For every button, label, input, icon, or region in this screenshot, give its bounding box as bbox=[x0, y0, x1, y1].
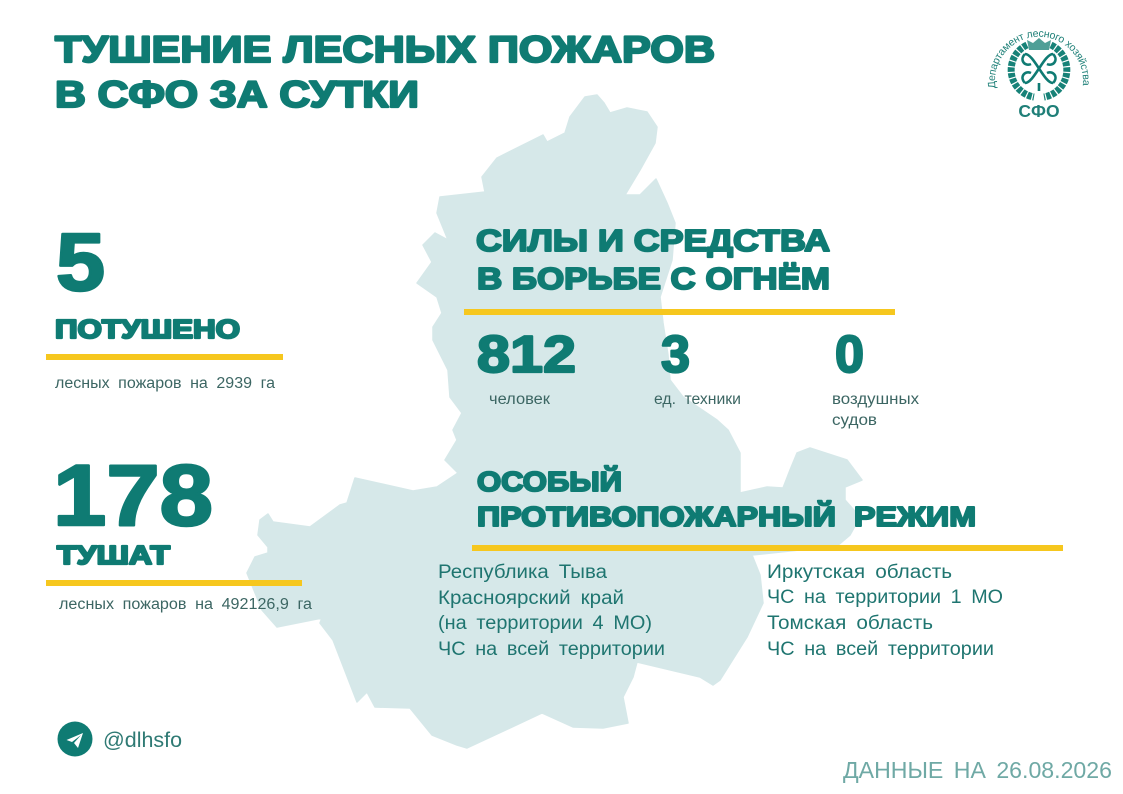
map: Siberian federal district silhouette bbox=[247, 95, 862, 748]
logo: department emblem bbox=[988, 31, 1089, 121]
logo: department emblem: Департамент лесного хозяйства bbox=[988, 31, 1089, 88]
stat: aircraft bbox=[832, 326, 919, 429]
regime list: left column: (на территории 4 МО) bbox=[438, 613, 652, 634]
heading: special fire regime bbox=[472, 465, 1063, 551]
heading: forces and means: В БОРЬБЕ С ОГНЁМ bbox=[477, 261, 830, 296]
title: В СФО ЗА СУТКИ bbox=[55, 74, 419, 115]
regime list: right column: ЧС на всей территории bbox=[767, 639, 994, 660]
data date: ДАННЫЕ НА 26.08.2026 bbox=[843, 757, 1112, 783]
icon: telegram bbox=[58, 722, 92, 756]
stat: aircraft: воздушных bbox=[832, 391, 919, 408]
stat: people: 812 bbox=[477, 326, 576, 384]
heading: special fire regime: ОСОБЫЙ bbox=[477, 465, 622, 497]
regime list: left column: ЧС на всей территории bbox=[438, 639, 665, 660]
heading: forces and means bbox=[464, 223, 895, 315]
regime list: left column bbox=[438, 562, 665, 660]
regime list: left column: Красноярский край bbox=[438, 588, 624, 609]
stat: being extinguished: 178 bbox=[53, 448, 213, 544]
stat: people: человек bbox=[489, 391, 550, 408]
stat: extinguished: 5 bbox=[56, 217, 105, 308]
stat: equipment bbox=[654, 326, 741, 408]
telegram handle: @dlhsfo bbox=[103, 729, 182, 752]
title: ТУШЕНИЕ ЛЕСНЫХ ПОЖАРОВ bbox=[55, 29, 715, 70]
stat: equipment: ед. техники bbox=[654, 391, 741, 408]
stat: extinguished: лесных пожаров на 2939 га bbox=[55, 375, 275, 392]
logo: department emblem: СФО bbox=[1018, 101, 1060, 121]
regime list: right column bbox=[767, 562, 1003, 660]
stat: aircraft: судов bbox=[832, 412, 877, 429]
stat: extinguished: ПОТУШЕНО bbox=[55, 314, 240, 344]
stat: being extinguished bbox=[46, 448, 312, 613]
stat: extinguished bbox=[46, 217, 283, 392]
stat: aircraft: 0 bbox=[835, 326, 864, 384]
title bbox=[55, 29, 715, 115]
regime list: right column: ЧС на территории 1 МО bbox=[767, 587, 1003, 608]
heading: forces and means: СИЛЫ И СРЕДСТВА bbox=[476, 223, 830, 258]
regime list: right column: Томская область bbox=[767, 613, 933, 634]
regime list: right column: Иркутская область bbox=[767, 562, 952, 583]
heading: special fire regime: ПРОТИВОПОЖАРНЫЙ РЕЖИМ bbox=[477, 500, 976, 532]
stat: people bbox=[477, 326, 576, 408]
stat: being extinguished: лесных пожаров на 492126,9 га bbox=[59, 596, 312, 613]
stat: equipment: 3 bbox=[661, 326, 690, 384]
regime list: left column: Республика Тыва bbox=[438, 562, 607, 583]
stat: being extinguished: ТУШАТ bbox=[57, 540, 170, 570]
